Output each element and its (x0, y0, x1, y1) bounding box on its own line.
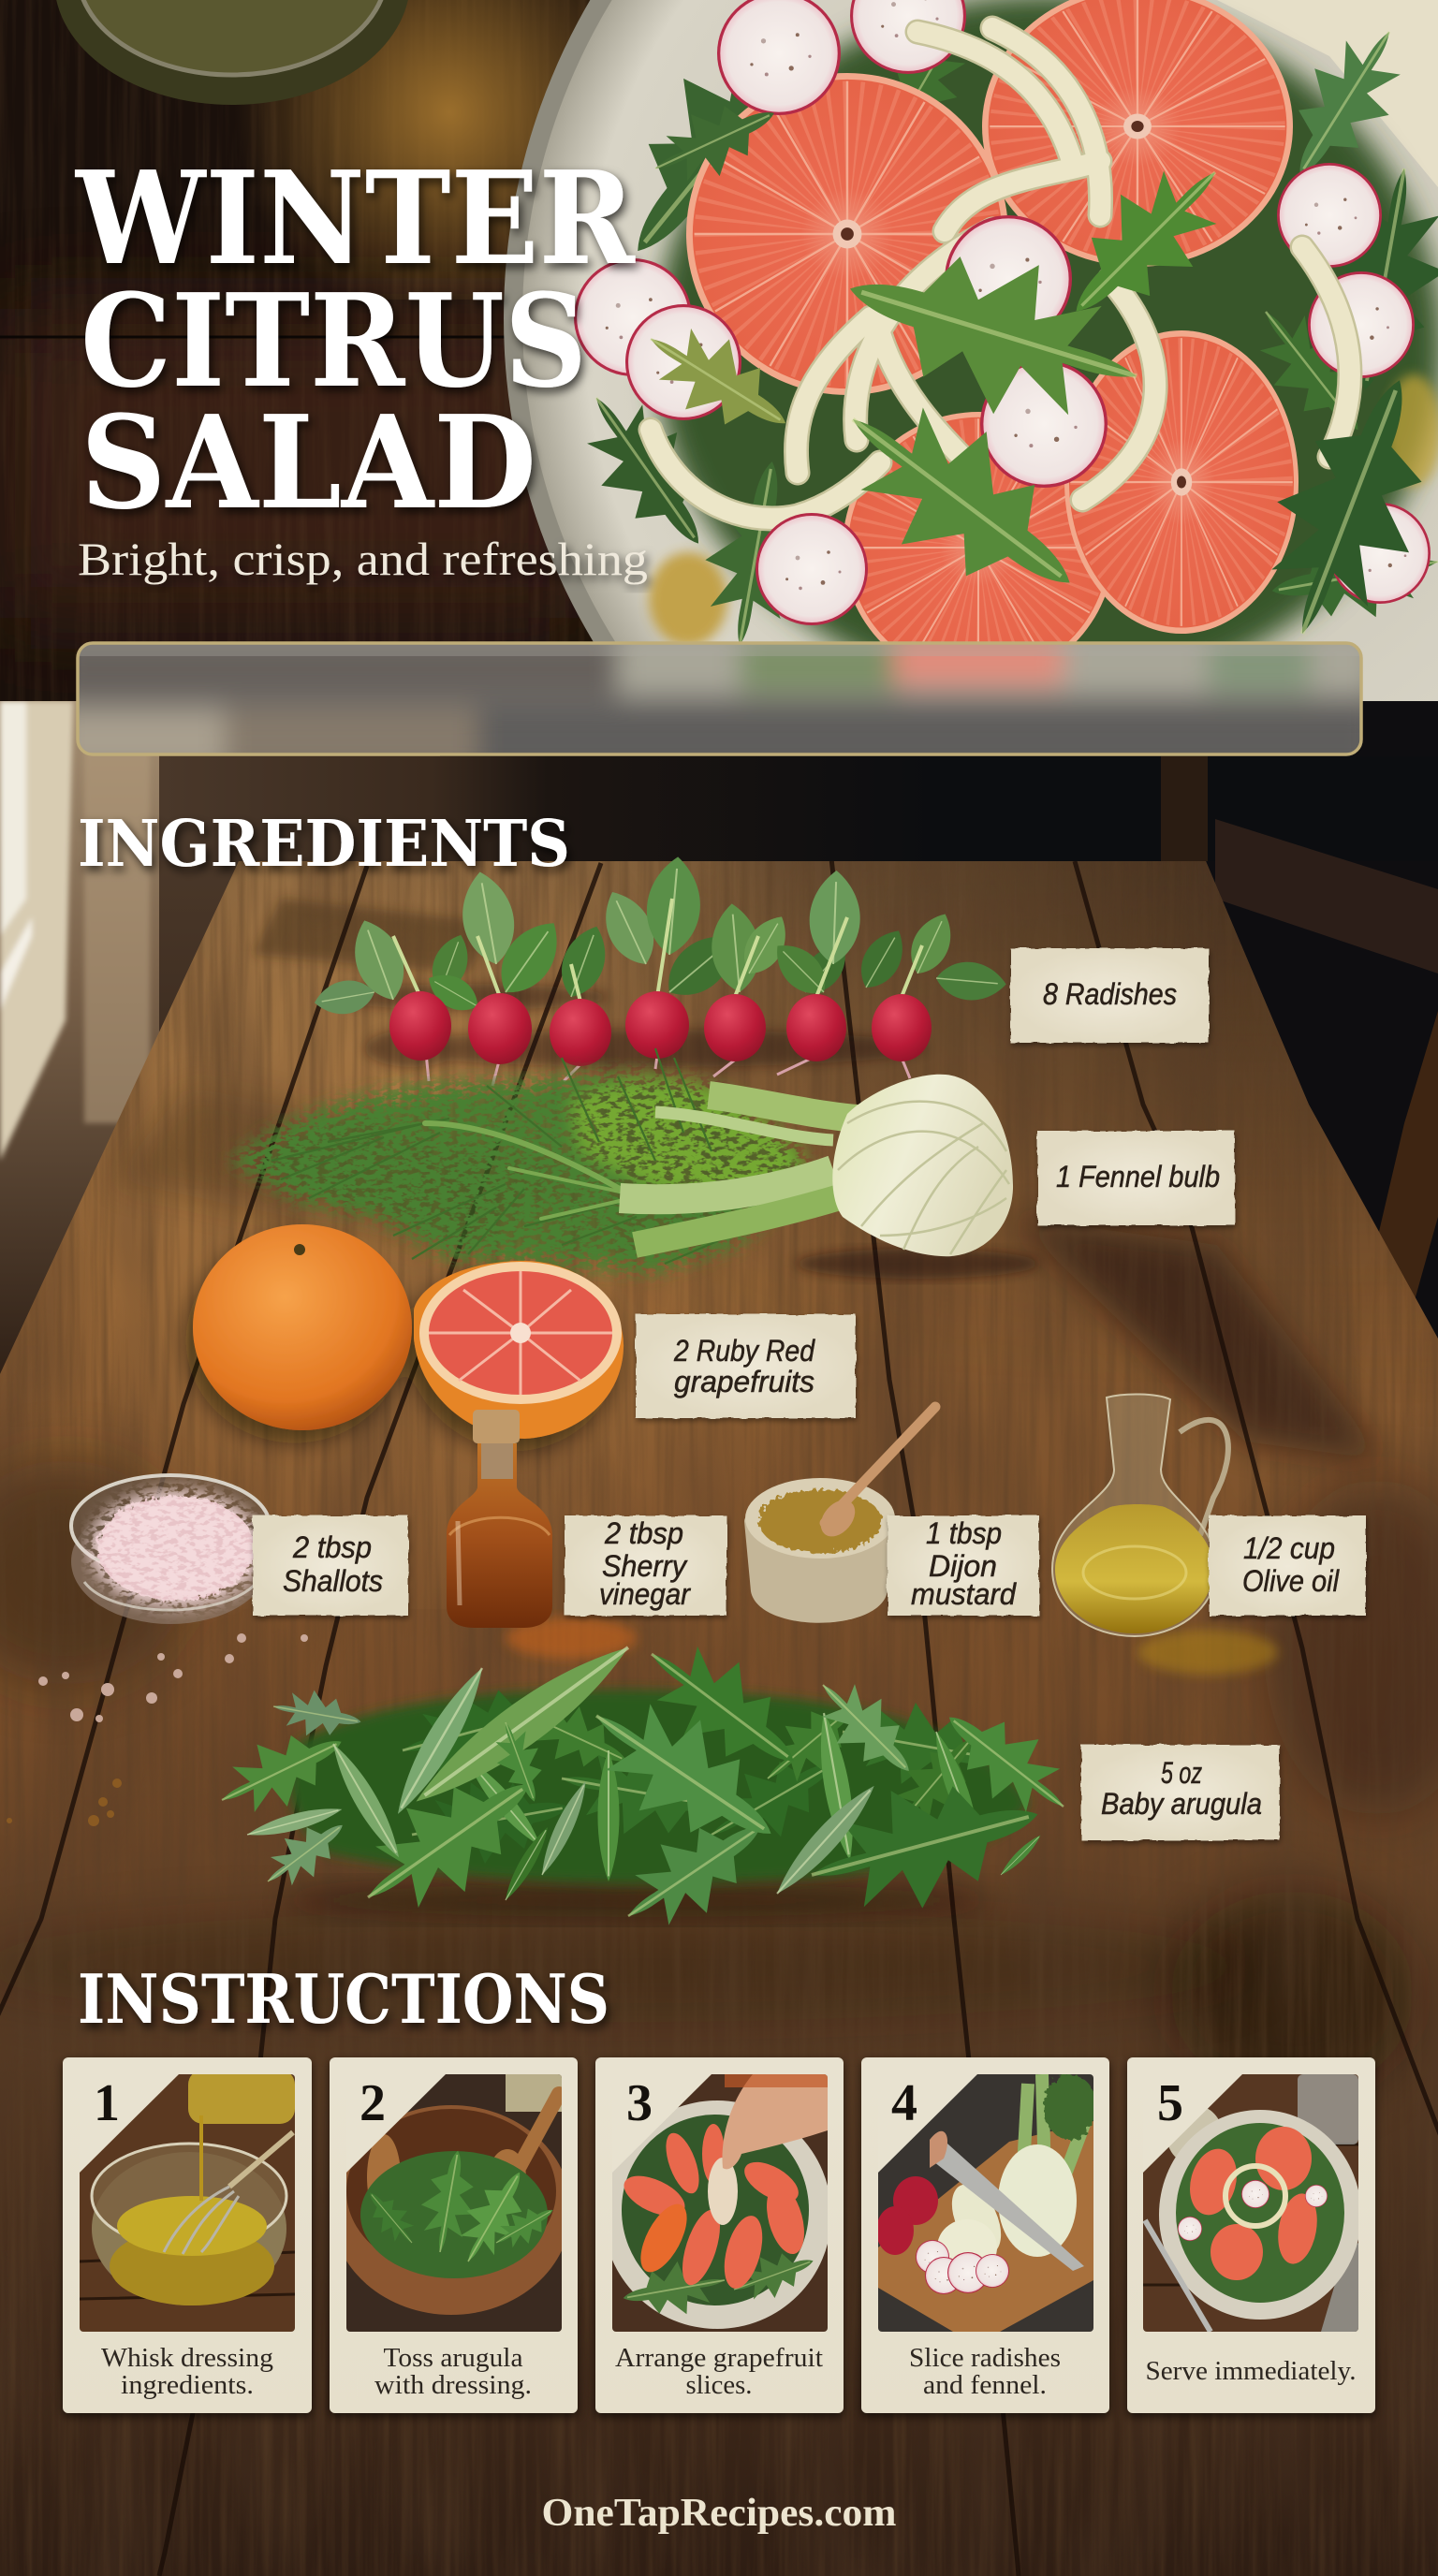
ingredient: dijon mustard pot (744, 1407, 935, 1623)
label: sherry vinegar: vinegar (599, 1577, 691, 1611)
step card 4 (861, 2057, 1109, 2413)
step 3 number corner (612, 2074, 712, 2173)
label: sherry vinegar: Sherry (602, 1549, 688, 1583)
step 3 caption: Arrange grapefruit (615, 2343, 823, 2373)
step 3 photo: arranging grapefruit (603, 2074, 831, 2332)
ingredient: shallots bowl (71, 1475, 270, 1624)
step 5 photo: plated salad (1143, 2074, 1361, 2332)
step card 3 (595, 2057, 844, 2413)
hero photo: salad plate on dark wood (0, 0, 1438, 701)
title: CITRUS (81, 266, 587, 417)
step 4 caption: and fennel. (923, 2370, 1047, 2400)
label: sherry vinegar (565, 1515, 726, 1616)
title: WINTER (74, 143, 636, 294)
label: radishes: 8 Radishes (1043, 977, 1177, 1011)
step 2 caption (374, 2343, 532, 2400)
label: sherry vinegar: 2 tbsp (604, 1516, 683, 1550)
label: arugula: 5 oz (1161, 1756, 1202, 1790)
step 1 caption (101, 2343, 273, 2400)
heading: ingredients: INGREDIENTS (78, 807, 570, 882)
ingredient: radishes (312, 855, 1007, 1086)
label: dijon mustard: mustard (911, 1577, 1017, 1611)
label: radishes (1010, 948, 1209, 1043)
title (74, 143, 636, 538)
step 2 caption: with dressing. (374, 2370, 532, 2400)
ingredient: fennel (229, 1048, 1039, 1279)
step 4 number corner (878, 2074, 977, 2173)
label: dijon mustard: 1 tbsp (926, 1516, 1002, 1550)
ingredient: arugula pile (207, 1617, 1087, 1951)
label: olive oil: Olive oil (1242, 1564, 1340, 1598)
step 2 number corner (346, 2074, 446, 2173)
step 2 photo: tossing arugula (346, 2074, 562, 2332)
footer website: OneTapRecipes.com (541, 2492, 897, 2535)
label: grapefruits: grapefruits (674, 1365, 814, 1398)
step card 2 (330, 2057, 578, 2413)
step 2 number corner: 2 (360, 2074, 386, 2132)
label: grapefruits (636, 1314, 856, 1418)
step 1 number corner: 1 (94, 2074, 120, 2132)
step 2 caption: Toss arugula (384, 2343, 523, 2373)
ingredient: grapefruits (193, 1224, 624, 1439)
label: fennel: 1 Fennel bulb (1056, 1160, 1220, 1193)
heading: instructions: INSTRUCTIONS (78, 1959, 609, 2039)
step 3 caption: slices. (685, 2370, 753, 2400)
frosted blurred banner (76, 641, 1363, 756)
wooden table (0, 858, 1438, 2576)
step 1 caption: ingredients. (121, 2370, 254, 2400)
subtitle: Bright, crisp, and refreshing (78, 533, 648, 585)
label: dijon mustard (888, 1515, 1039, 1616)
label: olive oil (1209, 1515, 1366, 1616)
label: shallots (253, 1515, 408, 1616)
step 1 number corner (80, 2074, 179, 2173)
step card 5 (1127, 2057, 1375, 2413)
title: SALAD (81, 388, 536, 538)
ingredient: olive oil jug (1052, 1394, 1278, 1675)
step 1 caption: Whisk dressing (101, 2343, 273, 2373)
label: shallots: Shallots (283, 1564, 383, 1598)
label: shallots: 2 tbsp (292, 1530, 372, 1564)
step 5 caption: Serve immediately. (1146, 2356, 1356, 2386)
step card 1 (63, 2057, 312, 2413)
step 1 photo: whisking dressing (80, 2070, 295, 2332)
ingredient: sherry vinegar bottle (447, 1410, 637, 1659)
label: arugula (1081, 1745, 1280, 1840)
step 4 photo: slicing radishes and fennel (876, 2074, 1096, 2332)
step 4 caption: Slice radishes (909, 2343, 1061, 2373)
background scene: room behind the table (0, 700, 1438, 1449)
label: arugula: Baby arugula (1101, 1787, 1262, 1821)
label: olive oil: 1/2 cup (1243, 1531, 1335, 1565)
label: grapefruits: 2 Ruby Red (673, 1334, 815, 1368)
step 4 number corner: 4 (891, 2074, 917, 2132)
step 4 caption (909, 2343, 1061, 2400)
step 5 number corner: 5 (1157, 2074, 1183, 2132)
step 3 number corner: 3 (626, 2074, 653, 2132)
label: dijon mustard: Dijon (929, 1549, 997, 1583)
step 5 number corner (1143, 2074, 1242, 2173)
scattered shallot crumbs (7, 1633, 308, 1826)
label: fennel (1037, 1131, 1235, 1225)
step 3 caption (615, 2343, 823, 2400)
